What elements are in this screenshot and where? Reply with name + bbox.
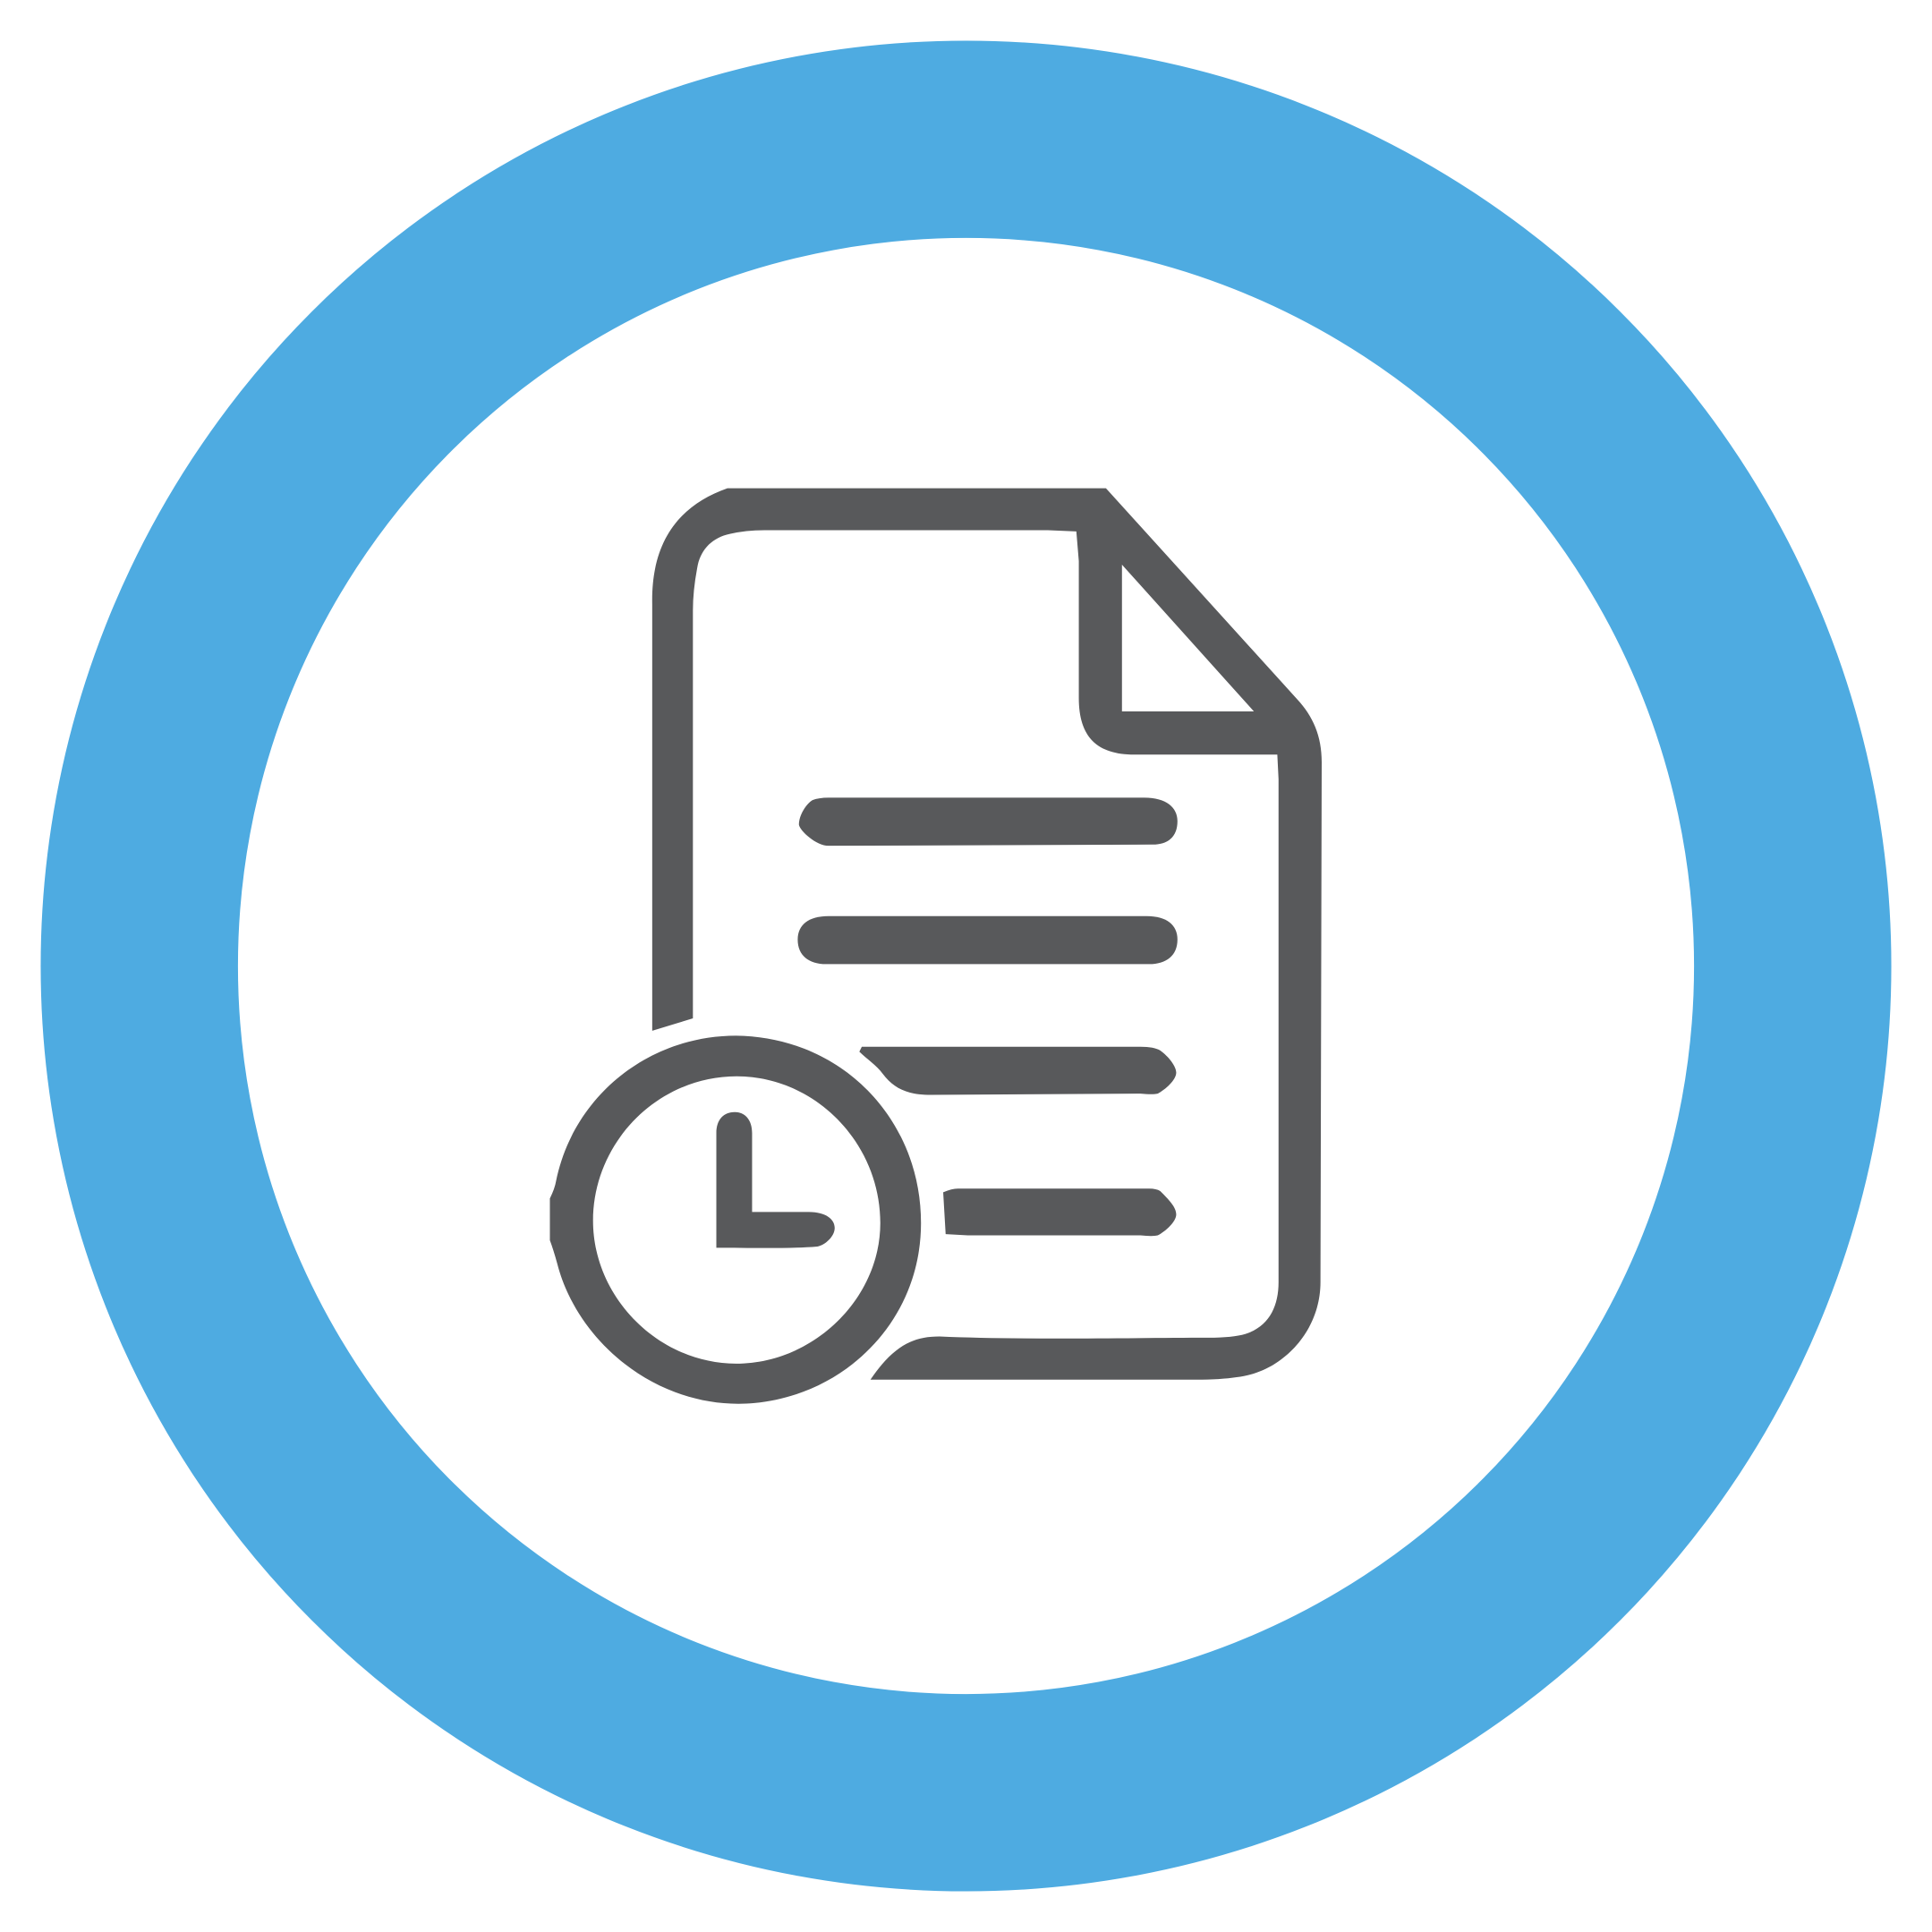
text line 2 — [797, 916, 1178, 964]
clock face ring — [549, 1035, 921, 1404]
clock hands — [716, 1112, 835, 1248]
blue circular ring — [140, 140, 1792, 1792]
icon: document with clock — [549, 489, 1322, 1404]
icon: document outline with folded corner — [652, 489, 1322, 1380]
text line 4 — [943, 1188, 1176, 1236]
text line 3 — [859, 1047, 1176, 1094]
icon: clock — [549, 1035, 921, 1404]
text line 1 — [799, 797, 1178, 846]
